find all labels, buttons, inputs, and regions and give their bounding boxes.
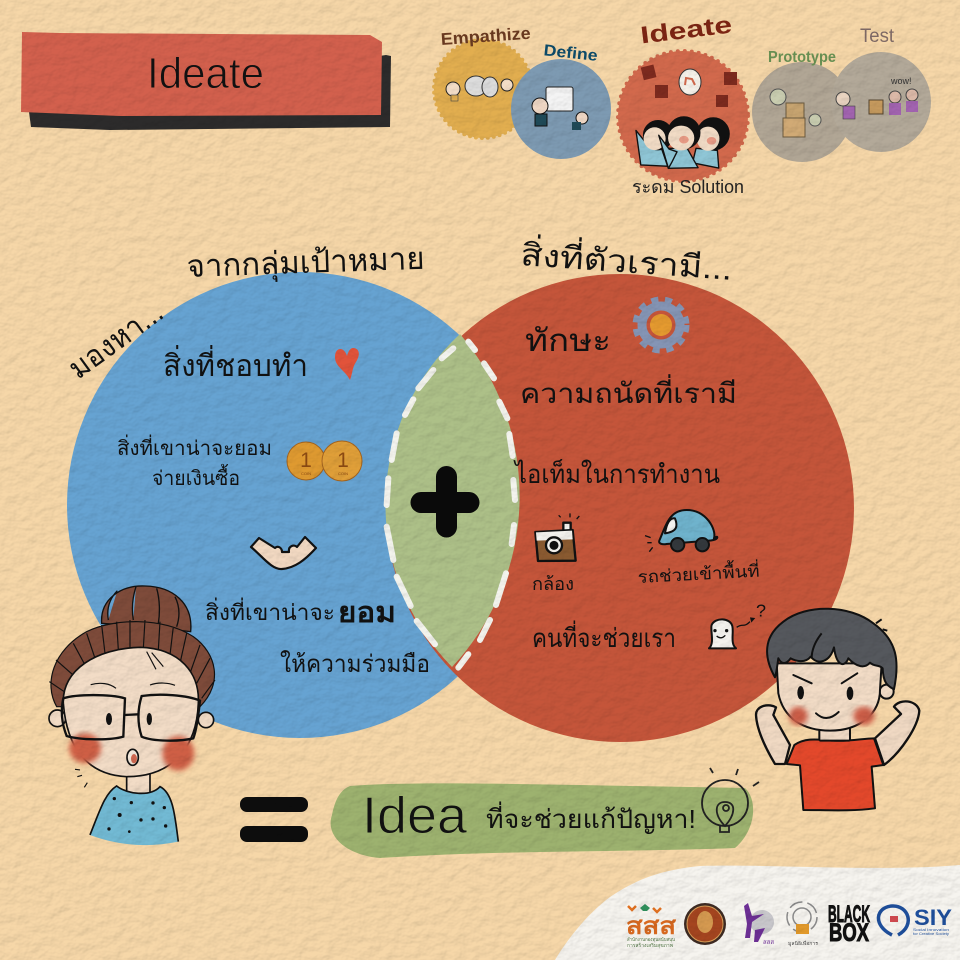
- text: willing to pay: [117, 434, 272, 490]
- text: willing to pay: จ่ายเงินซื้อ: [152, 464, 240, 490]
- icon: ghost with question: ?: [756, 601, 766, 621]
- icon: coins: 1: [300, 449, 312, 472]
- stage: test: [831, 26, 931, 152]
- text: work items: ไอเท็มในการทำงาน: [513, 458, 720, 489]
- boy: neck: [819, 727, 850, 741]
- heading: target group: จากกลุ่มเป้าหมาย: [186, 241, 425, 286]
- stage: test: Test: [860, 26, 895, 47]
- woman: cheeks: [69, 733, 194, 771]
- text: skills: ทักษะ: [525, 323, 611, 358]
- logo: thaihealth: [626, 904, 676, 949]
- text: willing to cooperate: ยอม: [338, 597, 396, 629]
- result banner: Idea: [362, 787, 467, 845]
- logo: purple figures: สสส: [763, 939, 774, 946]
- stage: define: [511, 42, 611, 159]
- woman: face: [63, 647, 198, 777]
- icon: camera: [535, 513, 579, 561]
- boy: ear: [880, 685, 894, 699]
- logo: concentric rings: [787, 902, 819, 947]
- heading: what we have: สิ่งที่ตัวเรามี...: [520, 233, 734, 287]
- stage: ideate: Ideate: [639, 11, 734, 49]
- icon: gear: [636, 300, 686, 350]
- woman: eyes and mouth: [75, 652, 175, 787]
- stage: test: wow!: [890, 76, 912, 86]
- logo: SIY: Social Innovation: [913, 927, 949, 932]
- title banner: [21, 32, 391, 130]
- character: boy flexing: [756, 609, 919, 810]
- title banner: Ideate: [147, 49, 264, 98]
- icon: ghost with question: [709, 601, 766, 648]
- text: strengths: ความถนัดที่เรามี: [520, 374, 737, 409]
- circle: ourselves (red): [386, 274, 854, 742]
- logo: SIY: [878, 905, 952, 936]
- logo: purple figures: [744, 903, 774, 946]
- icon: handshake: [251, 537, 316, 569]
- logo: black box: [828, 901, 870, 947]
- stage: ideate: [618, 11, 748, 181]
- label: camera: กล้อง: [532, 574, 574, 594]
- text: willing to cooperate: [205, 597, 430, 678]
- stage: prototype: [752, 49, 852, 162]
- text: people who help: คนที่จะช่วยเรา: [532, 620, 676, 653]
- icon: light bulb: [702, 768, 759, 832]
- boy: arms: [756, 701, 919, 765]
- equals sign: [240, 797, 308, 842]
- text: what they like: สิ่งที่ชอบทำ: [163, 345, 308, 383]
- text: willing to cooperate: สิ่งที่เขาน่าจะ: [205, 597, 335, 625]
- label: car: รถช่วยเข้าพื้นที่: [637, 559, 760, 587]
- text: willing to cooperate: ให้ความร่วมมือ: [280, 650, 430, 678]
- character: woman with glasses: [49, 586, 215, 845]
- logo: thaihealth: การสร้างเสริมสุขภาพ: [627, 942, 673, 949]
- woman: bun: [102, 586, 191, 632]
- logo: SIY: for Creative Society: [913, 931, 949, 936]
- stage: prototype: Prototype: [768, 49, 836, 66]
- icon: coins: COIN: [338, 471, 348, 476]
- logo: thaihealth: สำนักงานกองทุนสนับสนุน: [627, 937, 675, 943]
- logo: concentric rings: มูลนิธิเพื่อการ: [788, 940, 819, 947]
- stage: empathize: Empathize: [440, 24, 531, 49]
- text: willing to pay: สิ่งที่เขาน่าจะยอม: [117, 434, 272, 460]
- circle: target group (blue): [67, 272, 533, 738]
- boy: hair: [767, 609, 897, 689]
- woman: ears: [49, 710, 214, 728]
- overlap lens: [385, 334, 520, 668]
- result banner: ที่จะช่วยแก้ปัญหา!: [486, 801, 696, 834]
- woman: glasses: [62, 695, 200, 741]
- white corner panel: [555, 865, 960, 960]
- icon: heart: [335, 348, 359, 380]
- icon: coins: [287, 441, 362, 481]
- logo: round seal: [684, 903, 726, 945]
- boy: shirt: [787, 738, 883, 810]
- stage caption: ระดม Solution: [632, 177, 744, 197]
- boy: features: [793, 619, 887, 718]
- logo: black box: BOX: [829, 919, 869, 947]
- logo: SIY: SIY: [914, 905, 952, 930]
- woman: body: [90, 773, 178, 845]
- heading: look at: มองหา...: [63, 295, 169, 386]
- icon: car: [645, 510, 717, 552]
- boy: face: [777, 663, 882, 731]
- result banner: [331, 783, 753, 858]
- icon: coins: 1: [337, 449, 349, 472]
- woman: hair: [49, 620, 215, 707]
- stage: empathize: [434, 24, 532, 138]
- boy: cheeks: [789, 707, 875, 725]
- logo: thaihealth: สสส: [626, 913, 676, 940]
- stage: define: Define: [543, 42, 598, 65]
- logo: black box: BLACK: [828, 901, 870, 928]
- icon: coins: COIN: [301, 471, 311, 476]
- plus sign: [421, 476, 469, 527]
